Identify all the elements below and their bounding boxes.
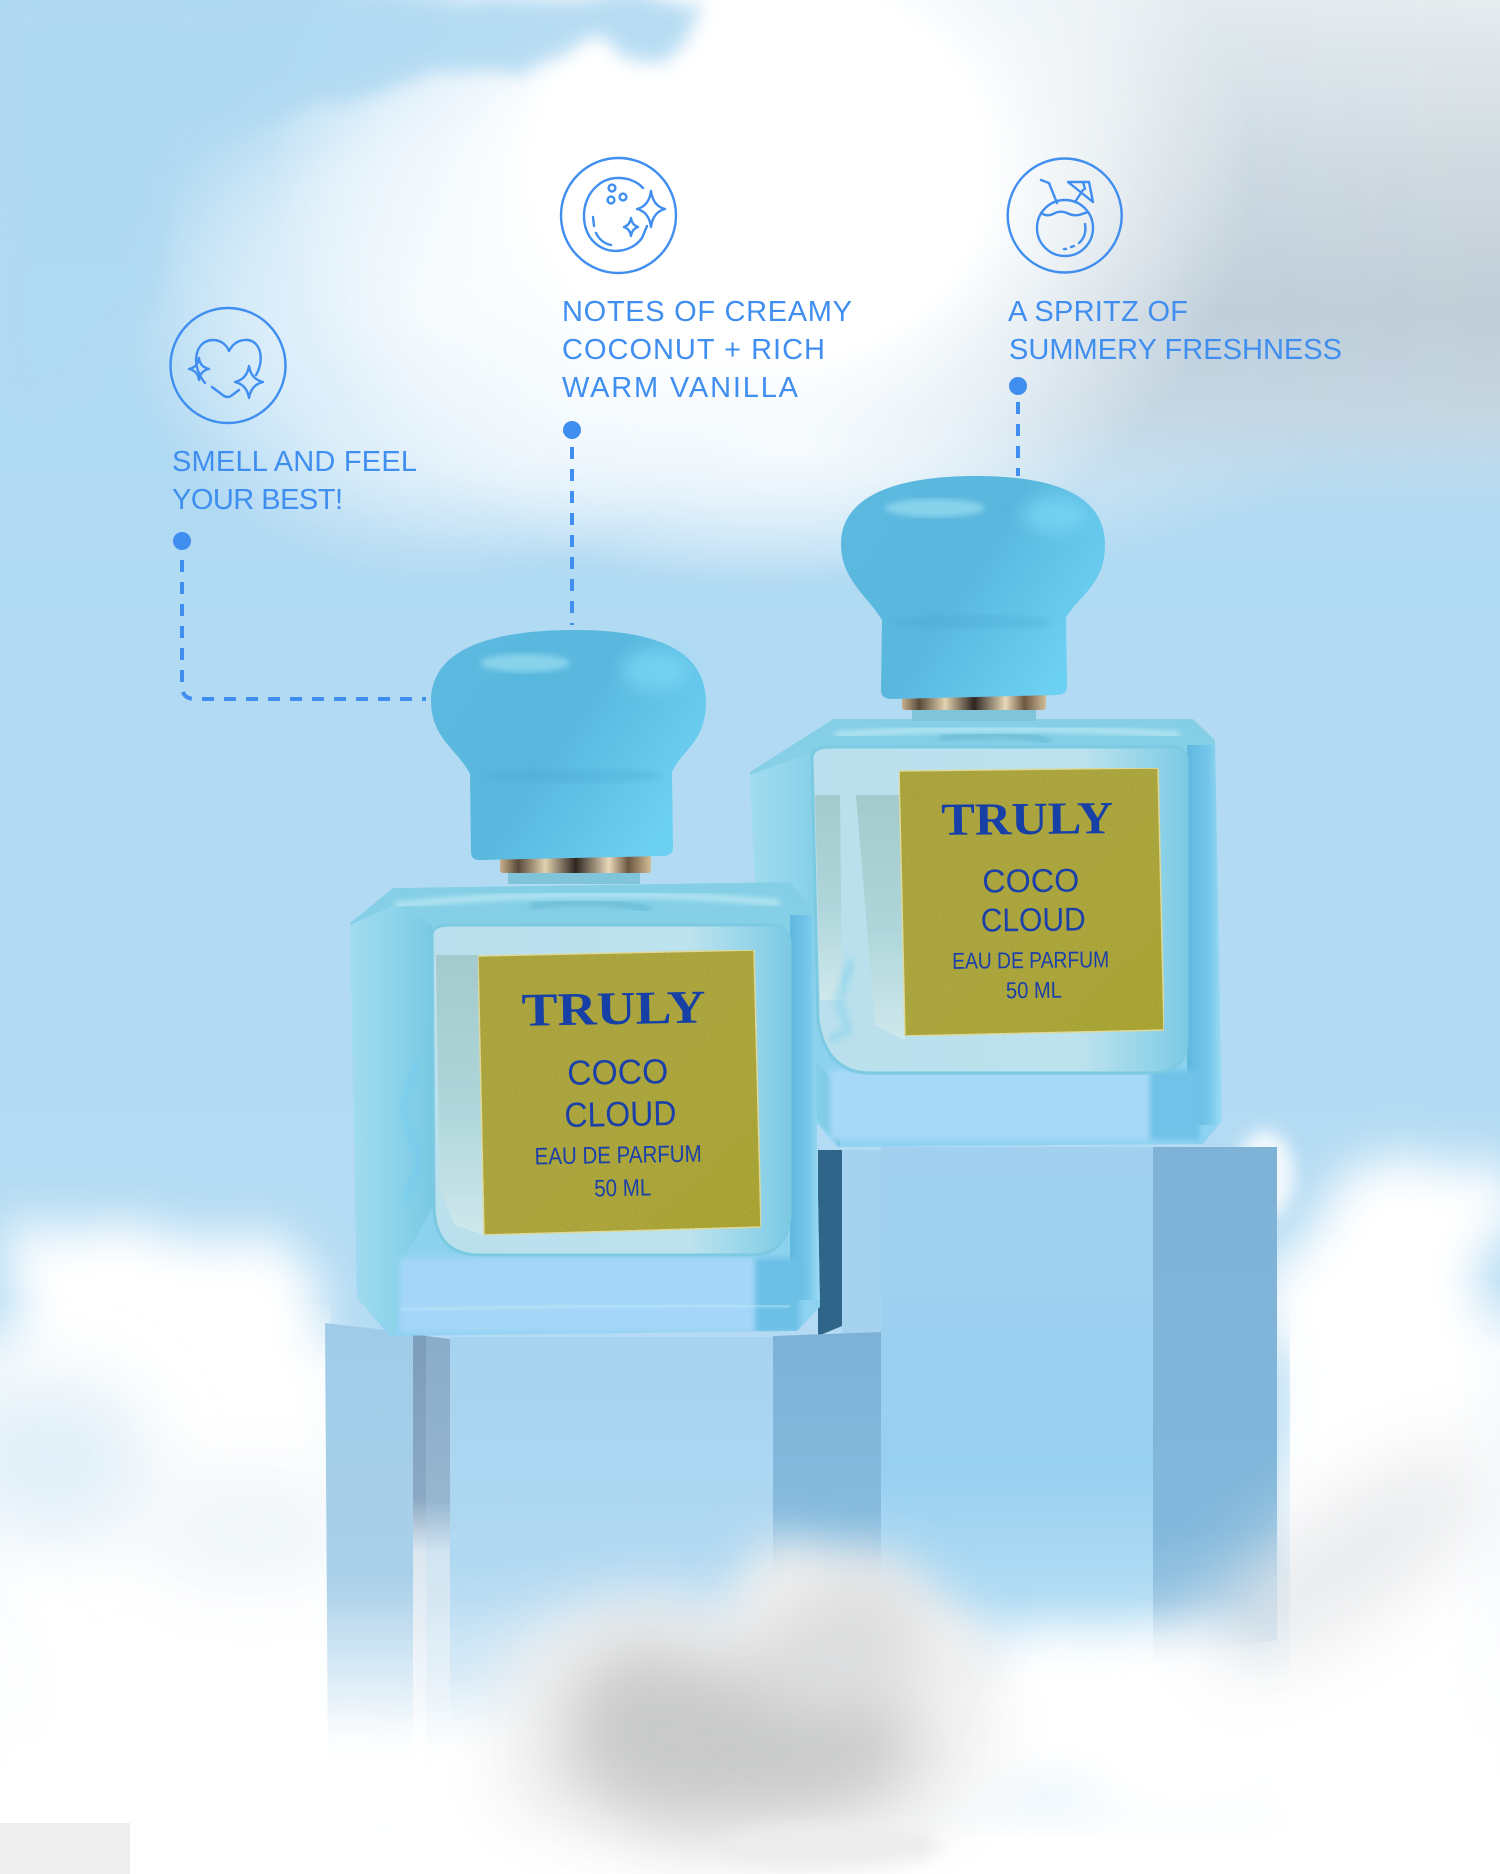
right bottle neck and collar	[902, 690, 1046, 721]
dot and dashed connector	[173, 532, 426, 699]
left label text: TRULY	[521, 981, 706, 1037]
left label text	[521, 981, 709, 1204]
right label text	[941, 792, 1115, 1004]
text: spritz of summery freshness	[1008, 296, 1342, 366]
upper clouds	[148, 0, 1500, 574]
left label text: 50 ML	[594, 1174, 651, 1202]
text: spritz of summery freshness: A SPRITZ OF	[1008, 296, 1188, 328]
right label text: CLOUD	[981, 900, 1086, 939]
left bottle cap	[431, 630, 706, 860]
left bottle gold label	[478, 950, 761, 1235]
icon: coconut with sparkles	[561, 158, 676, 273]
left bottle glass body	[350, 882, 820, 1336]
icon: heart with sparkles	[170, 308, 286, 423]
text: smell and feel: YOUR BEST!	[172, 484, 343, 516]
right label text: TRULY	[941, 792, 1113, 845]
text: smell and feel: SMELL AND FEEL	[172, 446, 417, 478]
pedestal: left	[325, 1323, 881, 1777]
right bottle gold label	[899, 768, 1164, 1036]
bottle: right	[750, 476, 1222, 1147]
text: notes of creamy coconut: WARM VANILLA	[562, 372, 799, 404]
left label text: EAU DE PARFUM	[534, 1141, 702, 1170]
pedestal: right	[818, 1147, 1277, 1727]
lower background clouds	[0, 1130, 1500, 1874]
text: smell and feel	[172, 446, 417, 516]
foreground clouds	[0, 1422, 1500, 1874]
callout: spritz of summery freshness	[1008, 158, 1342, 476]
right label text: 50 ML	[1006, 977, 1062, 1003]
right bottle glass body	[750, 719, 1222, 1147]
text: notes of creamy coconut: COCONUT + RICH	[562, 334, 825, 366]
callout: notes of coconut and vanilla	[561, 158, 852, 625]
icon: coconut drink with umbrella	[1008, 158, 1122, 272]
text: spritz of summery freshness: SUMMERY FRESHNESS	[1009, 334, 1342, 366]
left label text: CLOUD	[564, 1094, 677, 1135]
right label text: COCO	[982, 861, 1079, 899]
dot and dashed connector	[563, 421, 581, 625]
text: notes of creamy coconut	[562, 296, 852, 404]
callout: smell and feel your best	[170, 308, 426, 699]
right bottle cap	[841, 476, 1105, 699]
dot and dashed connector	[1009, 377, 1027, 476]
left bottle neck and collar	[500, 853, 651, 884]
bottle: left	[350, 630, 820, 1336]
text: notes of creamy coconut: NOTES OF CREAMY	[562, 296, 852, 328]
right label text: EAU DE PARFUM	[952, 946, 1109, 974]
left label text: COCO	[567, 1052, 669, 1093]
